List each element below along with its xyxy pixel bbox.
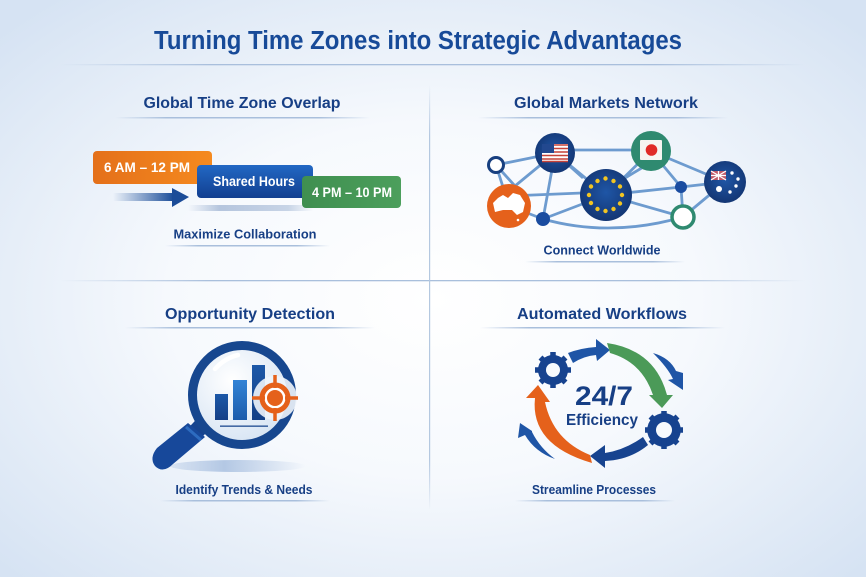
node: Australia map xyxy=(487,184,531,228)
heading: automated workflows: Automated Workflows xyxy=(517,306,687,323)
label: 24/7: 24/7 xyxy=(575,381,633,411)
node: small blue right xyxy=(675,181,687,193)
time bar: 6 AM to 12 PM xyxy=(93,151,212,184)
time bar: shared hours xyxy=(197,165,313,198)
bar shadow xyxy=(188,205,313,211)
arrow: navy bottom xyxy=(590,437,648,468)
network connections xyxy=(496,150,725,228)
bar chart xyxy=(215,365,268,427)
heading: global markets network: Global Markets Network xyxy=(514,95,698,112)
label: efficiency: Efficiency xyxy=(566,412,638,429)
node: small blue left xyxy=(536,212,550,226)
node: EU flag xyxy=(580,169,632,221)
icon: magnifying glass xyxy=(152,346,298,470)
arrow: small blue left xyxy=(518,423,555,459)
node: green ring xyxy=(672,206,694,228)
arrow: orange xyxy=(526,385,592,463)
magnifier shadow xyxy=(170,460,306,472)
icon: gear left xyxy=(535,352,571,388)
caption: streamline processes: Streamline Processes xyxy=(532,482,656,497)
panel: automated workflows xyxy=(480,306,725,502)
arrow: green xyxy=(607,343,673,408)
arrow xyxy=(113,188,189,207)
time bar: 4 PM to 10 PM: 4 PM – 10 PM xyxy=(312,185,392,200)
panel: global markets network xyxy=(478,95,746,262)
panel: global time zone overlap xyxy=(93,95,401,246)
caption: connect worldwide: Connect Worldwide xyxy=(544,242,660,258)
node: Australia flag xyxy=(704,161,746,203)
time bar: 6 AM to 12 PM: 6 AM – 12 PM xyxy=(104,159,190,175)
node: USA flag xyxy=(535,133,575,173)
caption: identify trends and needs: Identify Trends & Needs xyxy=(176,482,312,497)
arrow: blue top xyxy=(568,339,610,363)
title: Turning Time Zones into Strategic Advantages xyxy=(154,27,682,55)
caption: maximize collaboration: Maximize Collaboration xyxy=(174,226,317,242)
panel: opportunity detection xyxy=(125,306,375,502)
heading: global time zone overlap: Global Time Zone Overlap xyxy=(144,95,341,112)
heading: opportunity detection: Opportunity Detection xyxy=(165,306,335,323)
node: Japan flag xyxy=(631,131,671,171)
node: small ring xyxy=(488,158,504,172)
arrow: small blue right xyxy=(653,353,683,390)
icon: target xyxy=(252,375,298,421)
icon: gear right xyxy=(645,411,683,449)
time bar: shared hours: Shared Hours xyxy=(213,174,295,189)
time bar: 4 PM to 10 PM xyxy=(302,176,401,208)
